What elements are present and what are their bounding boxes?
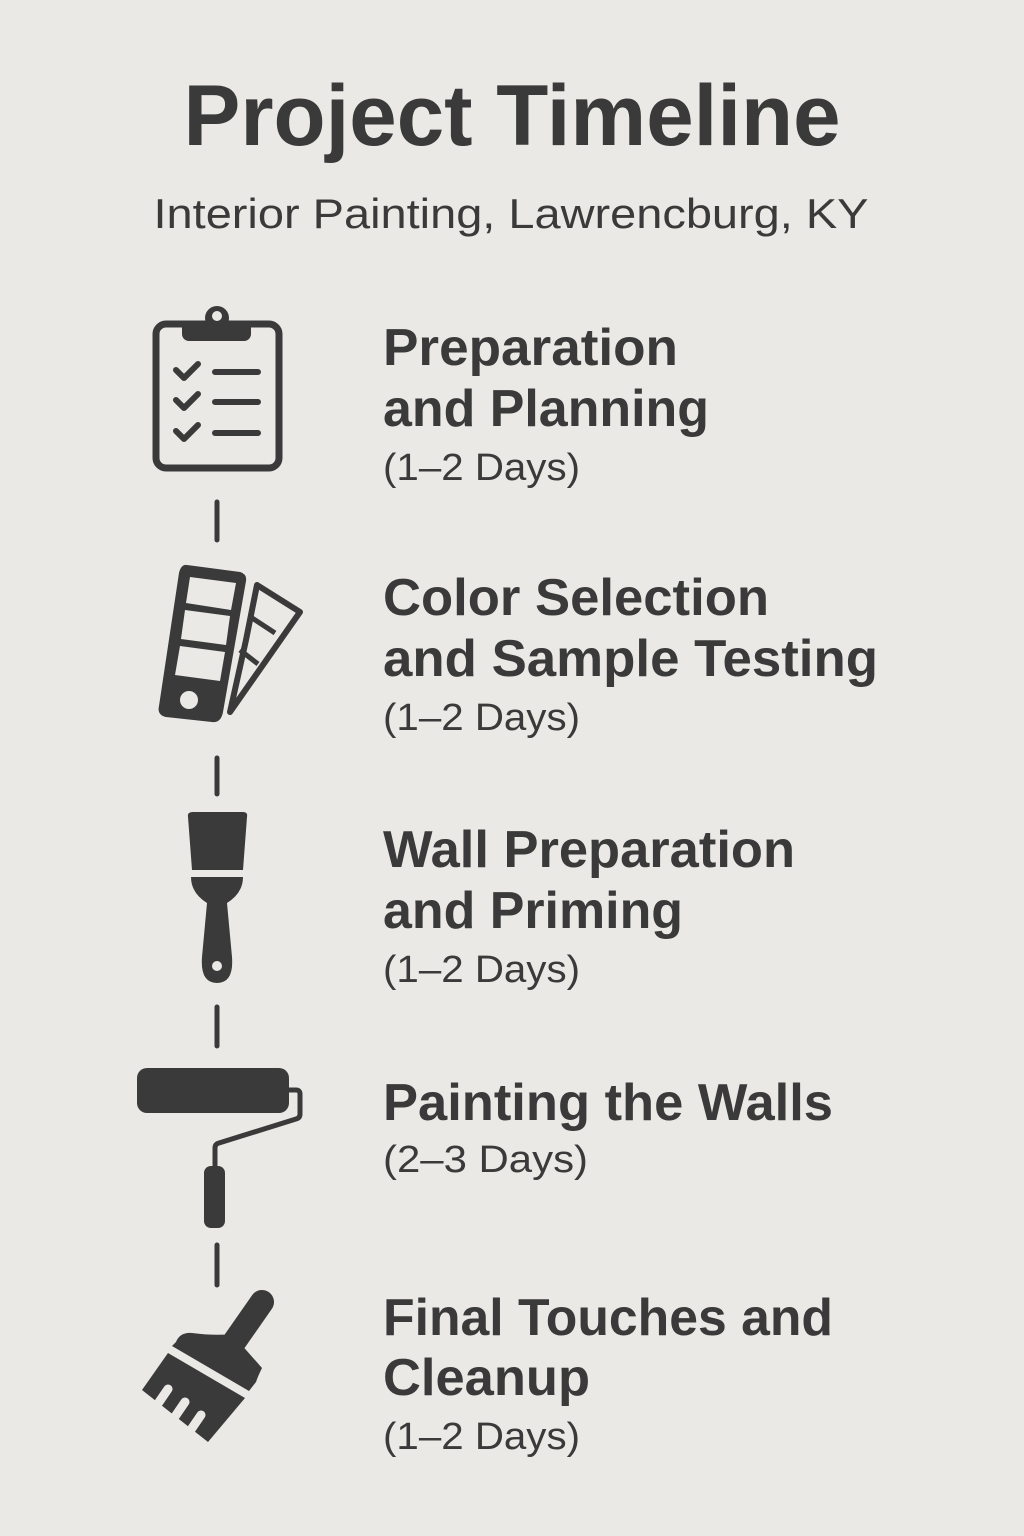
step 5 text: (1–2 Days) <box>383 1416 580 1458</box>
step 2 text <box>383 569 878 739</box>
connector 1 <box>214 502 220 540</box>
title: Project Timeline <box>184 68 840 164</box>
step 5 text: Final Touches and <box>383 1289 833 1347</box>
step 3 text: Wall Preparation <box>383 821 795 879</box>
step 5 text <box>383 1289 833 1458</box>
connector 3 <box>214 1007 220 1046</box>
step 1 text: (1–2 Days) <box>383 447 580 489</box>
connector 2 <box>214 758 220 794</box>
step 1 text <box>383 319 709 489</box>
step 2 text: (1–2 Days) <box>383 697 580 739</box>
connector 4 <box>214 1245 220 1285</box>
icon: paint brush <box>142 1302 262 1442</box>
step 2 text: and Sample Testing <box>383 630 878 688</box>
step 4 text: Painting the Walls <box>383 1074 833 1132</box>
step 4 text <box>383 1074 833 1181</box>
step 3 text <box>383 821 795 991</box>
icon: paint roller <box>137 1068 300 1228</box>
icon: scraper brush <box>188 812 247 983</box>
step 3 text: (1–2 Days) <box>383 949 580 991</box>
icon: color swatches <box>160 566 300 721</box>
step 3 text: and Priming <box>383 882 683 940</box>
step 1 text: and Planning <box>383 380 709 438</box>
icon: clipboard <box>156 306 279 468</box>
step 2 text: Color Selection <box>383 569 769 627</box>
step 1 text: Preparation <box>383 319 678 377</box>
step 5 text: Cleanup <box>383 1349 590 1407</box>
step 4 text: (2–3 Days) <box>383 1139 588 1181</box>
subtitle: Interior Painting, Lawrencburg, KY <box>154 190 868 237</box>
